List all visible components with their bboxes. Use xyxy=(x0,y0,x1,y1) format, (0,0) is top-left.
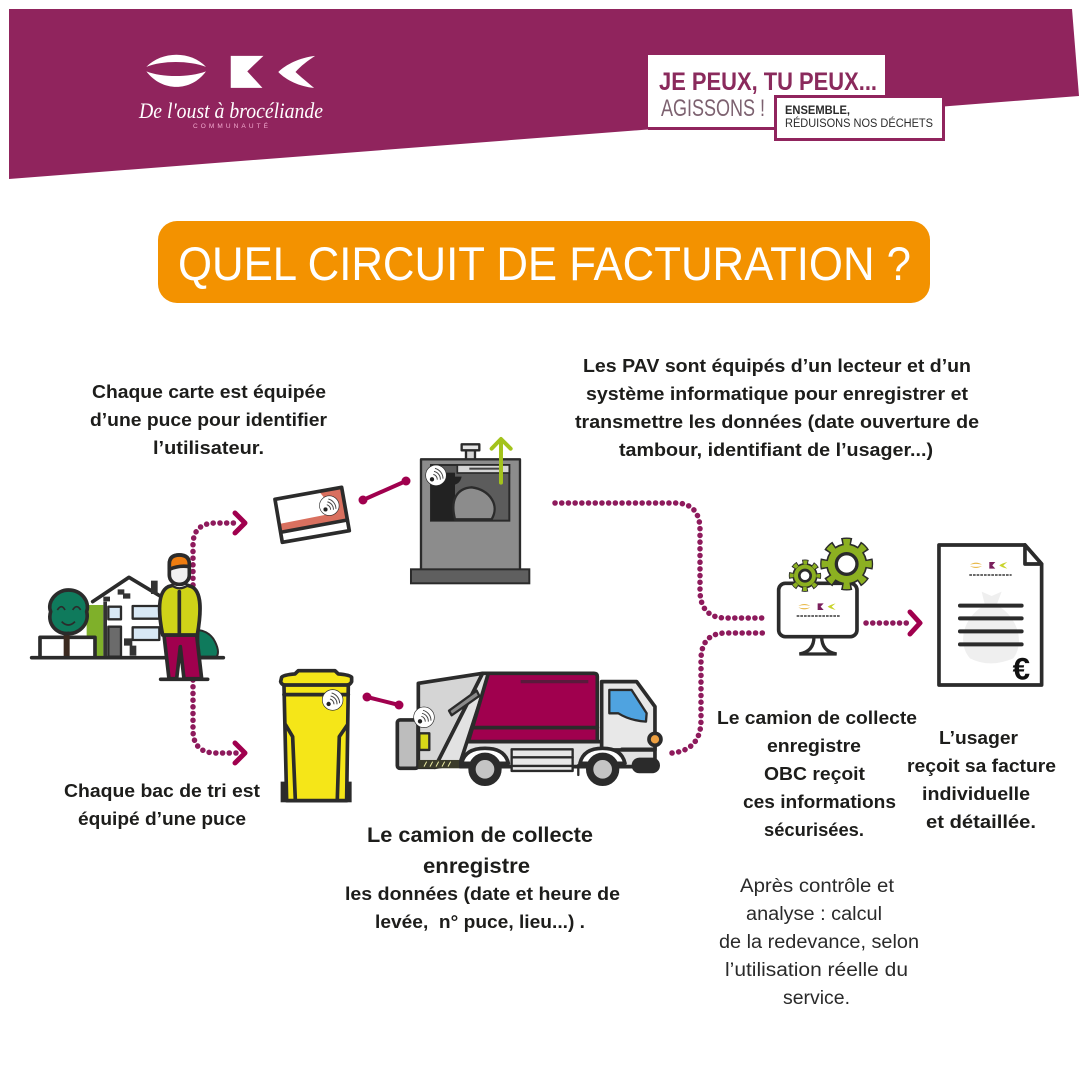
text: carte: d’une puce pour identifier xyxy=(90,409,327,430)
arrow: truck to computer xyxy=(672,633,765,753)
text: PAV xyxy=(575,355,979,460)
text: usager xyxy=(907,727,1056,832)
icon: yellow bin xyxy=(281,671,352,802)
text: carte: l’utilisateur. xyxy=(153,437,264,458)
text: OBC reçoit xyxy=(717,707,917,840)
text: camion: les données (date et heure de xyxy=(345,883,620,904)
text: PAV: transmettre les données (date ouverture de xyxy=(575,411,979,432)
slogan box: ensemble: ENSEMBLE, xyxy=(785,105,850,117)
text: PAV: système informatique pour enregistrer et xyxy=(586,383,968,404)
text: OBC reçoit: OBC reçoit xyxy=(764,763,865,784)
text: usager: et détaillée. xyxy=(926,811,1036,832)
slogan box: je peux, tu peux xyxy=(648,55,885,130)
text: OBC reçoit: enregistre xyxy=(767,735,861,756)
text: camion xyxy=(345,824,620,932)
text: calcul de la redevance: de la redevance, selon xyxy=(719,932,919,953)
text: camion: Le camion de collecte xyxy=(367,824,593,847)
icon: invoice xyxy=(939,545,1042,686)
arrow: computer to invoice xyxy=(866,612,920,634)
arrow: usager to carte xyxy=(193,513,245,585)
text: calcul de la redevance: service. xyxy=(783,988,850,1009)
title xyxy=(158,221,930,303)
OBC logo xyxy=(138,55,323,130)
text: carte: Chaque carte est équipée xyxy=(92,381,326,402)
icon: PAV container xyxy=(411,439,529,583)
connector: card to PAV xyxy=(358,476,410,504)
slogan box: ensemble xyxy=(776,96,944,140)
OBC logo: COMMUNAUTÉ xyxy=(193,121,269,130)
icon: collection truck xyxy=(397,673,661,782)
text: OBC reçoit: sécurisées. xyxy=(764,819,864,840)
text: PAV: Les PAV sont équipés d’un lecteur et d’un xyxy=(583,355,971,376)
text: camion: enregistre xyxy=(423,855,530,878)
icon: house, tree and resident xyxy=(32,555,223,679)
text: camion: levée, n° puce, lieu...) . xyxy=(375,911,585,932)
text: calcul de la redevance: analyse : calcul xyxy=(746,904,882,925)
text: usager: reçoit sa facture xyxy=(907,755,1056,776)
header banner xyxy=(9,9,1079,179)
title: QUEL CIRCUIT DE FACTURATION ? xyxy=(178,237,911,290)
text: OBC reçoit: ces informations xyxy=(743,791,896,812)
text: OBC reçoit: Le camion de collecte xyxy=(717,707,917,728)
text: calcul de la redevance xyxy=(719,876,919,1009)
slogan box: ensemble: RÉDUISONS NOS DÉCHETS xyxy=(785,117,933,130)
arrow: PAV to computer xyxy=(555,503,764,618)
text: bac: Chaque bac de tri est xyxy=(64,780,260,801)
OBC logo: De l'oust à brocéliande xyxy=(138,98,323,123)
text: calcul de la redevance: Après contrôle et xyxy=(740,876,895,897)
icon: computer with gears xyxy=(779,542,869,654)
text: bac: équipé d’une puce xyxy=(78,808,246,829)
slogan box: je peux, tu peux: AGISSONS ! xyxy=(661,95,765,122)
text: bac xyxy=(64,780,260,829)
text: usager: individuelle xyxy=(922,783,1030,804)
arrow: usager to bac xyxy=(193,680,245,763)
text: calcul de la redevance: l’utilisation réelle du xyxy=(725,960,908,981)
text: usager: L’usager xyxy=(939,727,1018,748)
connector: bin to truck xyxy=(362,692,404,710)
text: PAV: tambour, identifiant de l’usager...) xyxy=(619,439,933,460)
text: carte xyxy=(90,381,327,458)
slogan box: je peux, tu peux: JE PEUX, TU PEUX... xyxy=(659,68,877,96)
icon: invoice: € xyxy=(1013,651,1030,686)
icon: card with chip xyxy=(275,487,349,542)
